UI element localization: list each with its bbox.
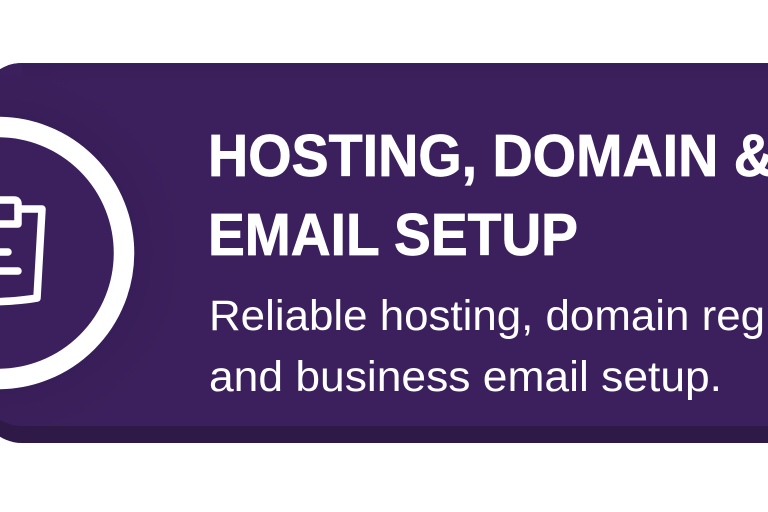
description text: and business email setup. bbox=[209, 353, 722, 401]
description text bbox=[209, 292, 765, 401]
description text: Reliable hosting, domain reg bbox=[209, 292, 765, 340]
heading bbox=[208, 123, 768, 268]
panel: purple card bbox=[0, 63, 768, 443]
icon: circle ring with clipboard bbox=[0, 127, 124, 379]
heading: EMAIL SETUP bbox=[208, 202, 578, 268]
icon: clipboard bbox=[0, 200, 42, 302]
